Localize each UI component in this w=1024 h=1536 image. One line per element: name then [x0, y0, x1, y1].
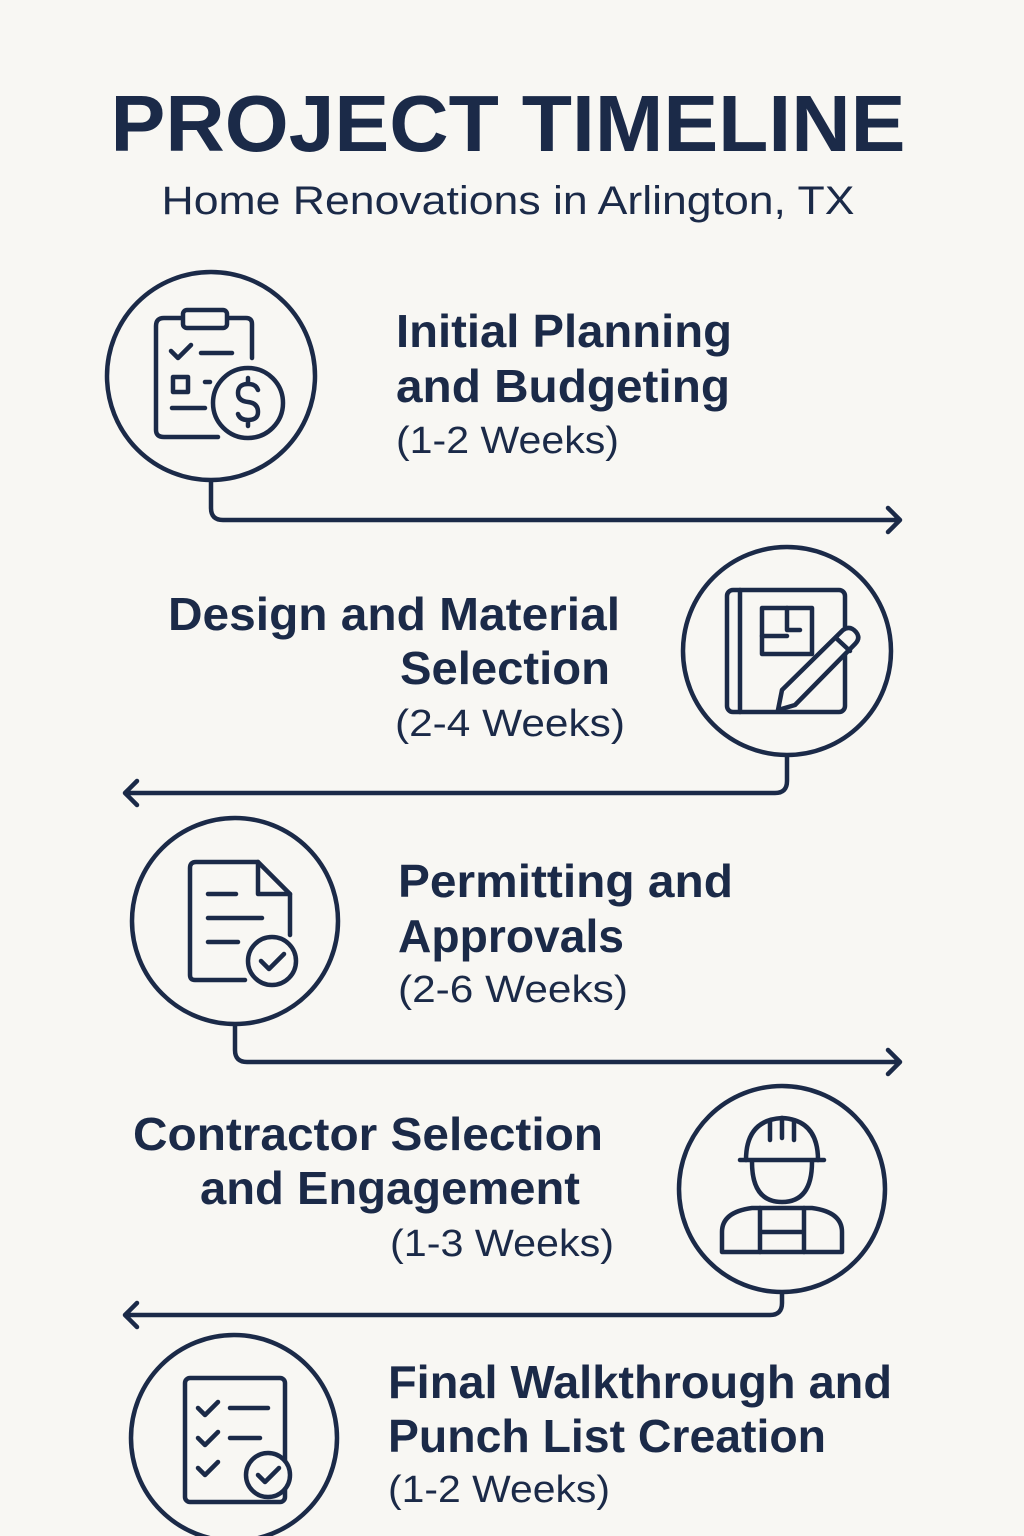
icon: document check	[132, 818, 338, 1024]
text: step 3: Permitting and	[398, 855, 733, 907]
text: step 3: (2-6 Weeks)	[398, 969, 628, 1011]
text: step 5: Punch List Creation	[388, 1410, 826, 1462]
text: step 2: Design and Material	[168, 588, 620, 640]
text: step 2	[168, 588, 625, 745]
icon: worker	[679, 1086, 885, 1292]
text: step 3	[398, 855, 733, 1011]
text: step 4	[133, 1108, 614, 1265]
icon: blueprint and pencil	[683, 547, 891, 755]
text: step 1: Initial Planning	[396, 305, 732, 357]
title: PROJECT TIMELINE	[110, 79, 906, 168]
arrow: connector 4	[125, 1292, 782, 1327]
text: step 1: (1-2 Weeks)	[396, 420, 619, 462]
text: step 4: and Engagement	[200, 1162, 580, 1214]
text: step 1: and Budgeting	[396, 360, 730, 412]
text: step 4: (1-3 Weeks)	[390, 1223, 614, 1265]
arrow: connector 3	[235, 1024, 900, 1074]
text: step 5: Final Walkthrough and	[388, 1356, 892, 1408]
subtitle: Home Renovations in Arlington, TX	[162, 179, 854, 223]
icon: checklist	[131, 1335, 337, 1536]
text: step 5: (1-2 Weeks)	[388, 1469, 610, 1511]
icon: clipboard with dollar	[107, 272, 315, 480]
arrow: connector 1	[211, 480, 900, 532]
text: step 1	[396, 305, 732, 462]
text: step 2: Selection	[400, 642, 610, 694]
text: step 3: Approvals	[398, 910, 624, 962]
arrow: connector 2	[125, 755, 787, 805]
text: step 2: (2-4 Weeks)	[395, 703, 625, 745]
text: step 5	[388, 1356, 892, 1511]
text: step 4: Contractor Selection	[133, 1108, 603, 1160]
